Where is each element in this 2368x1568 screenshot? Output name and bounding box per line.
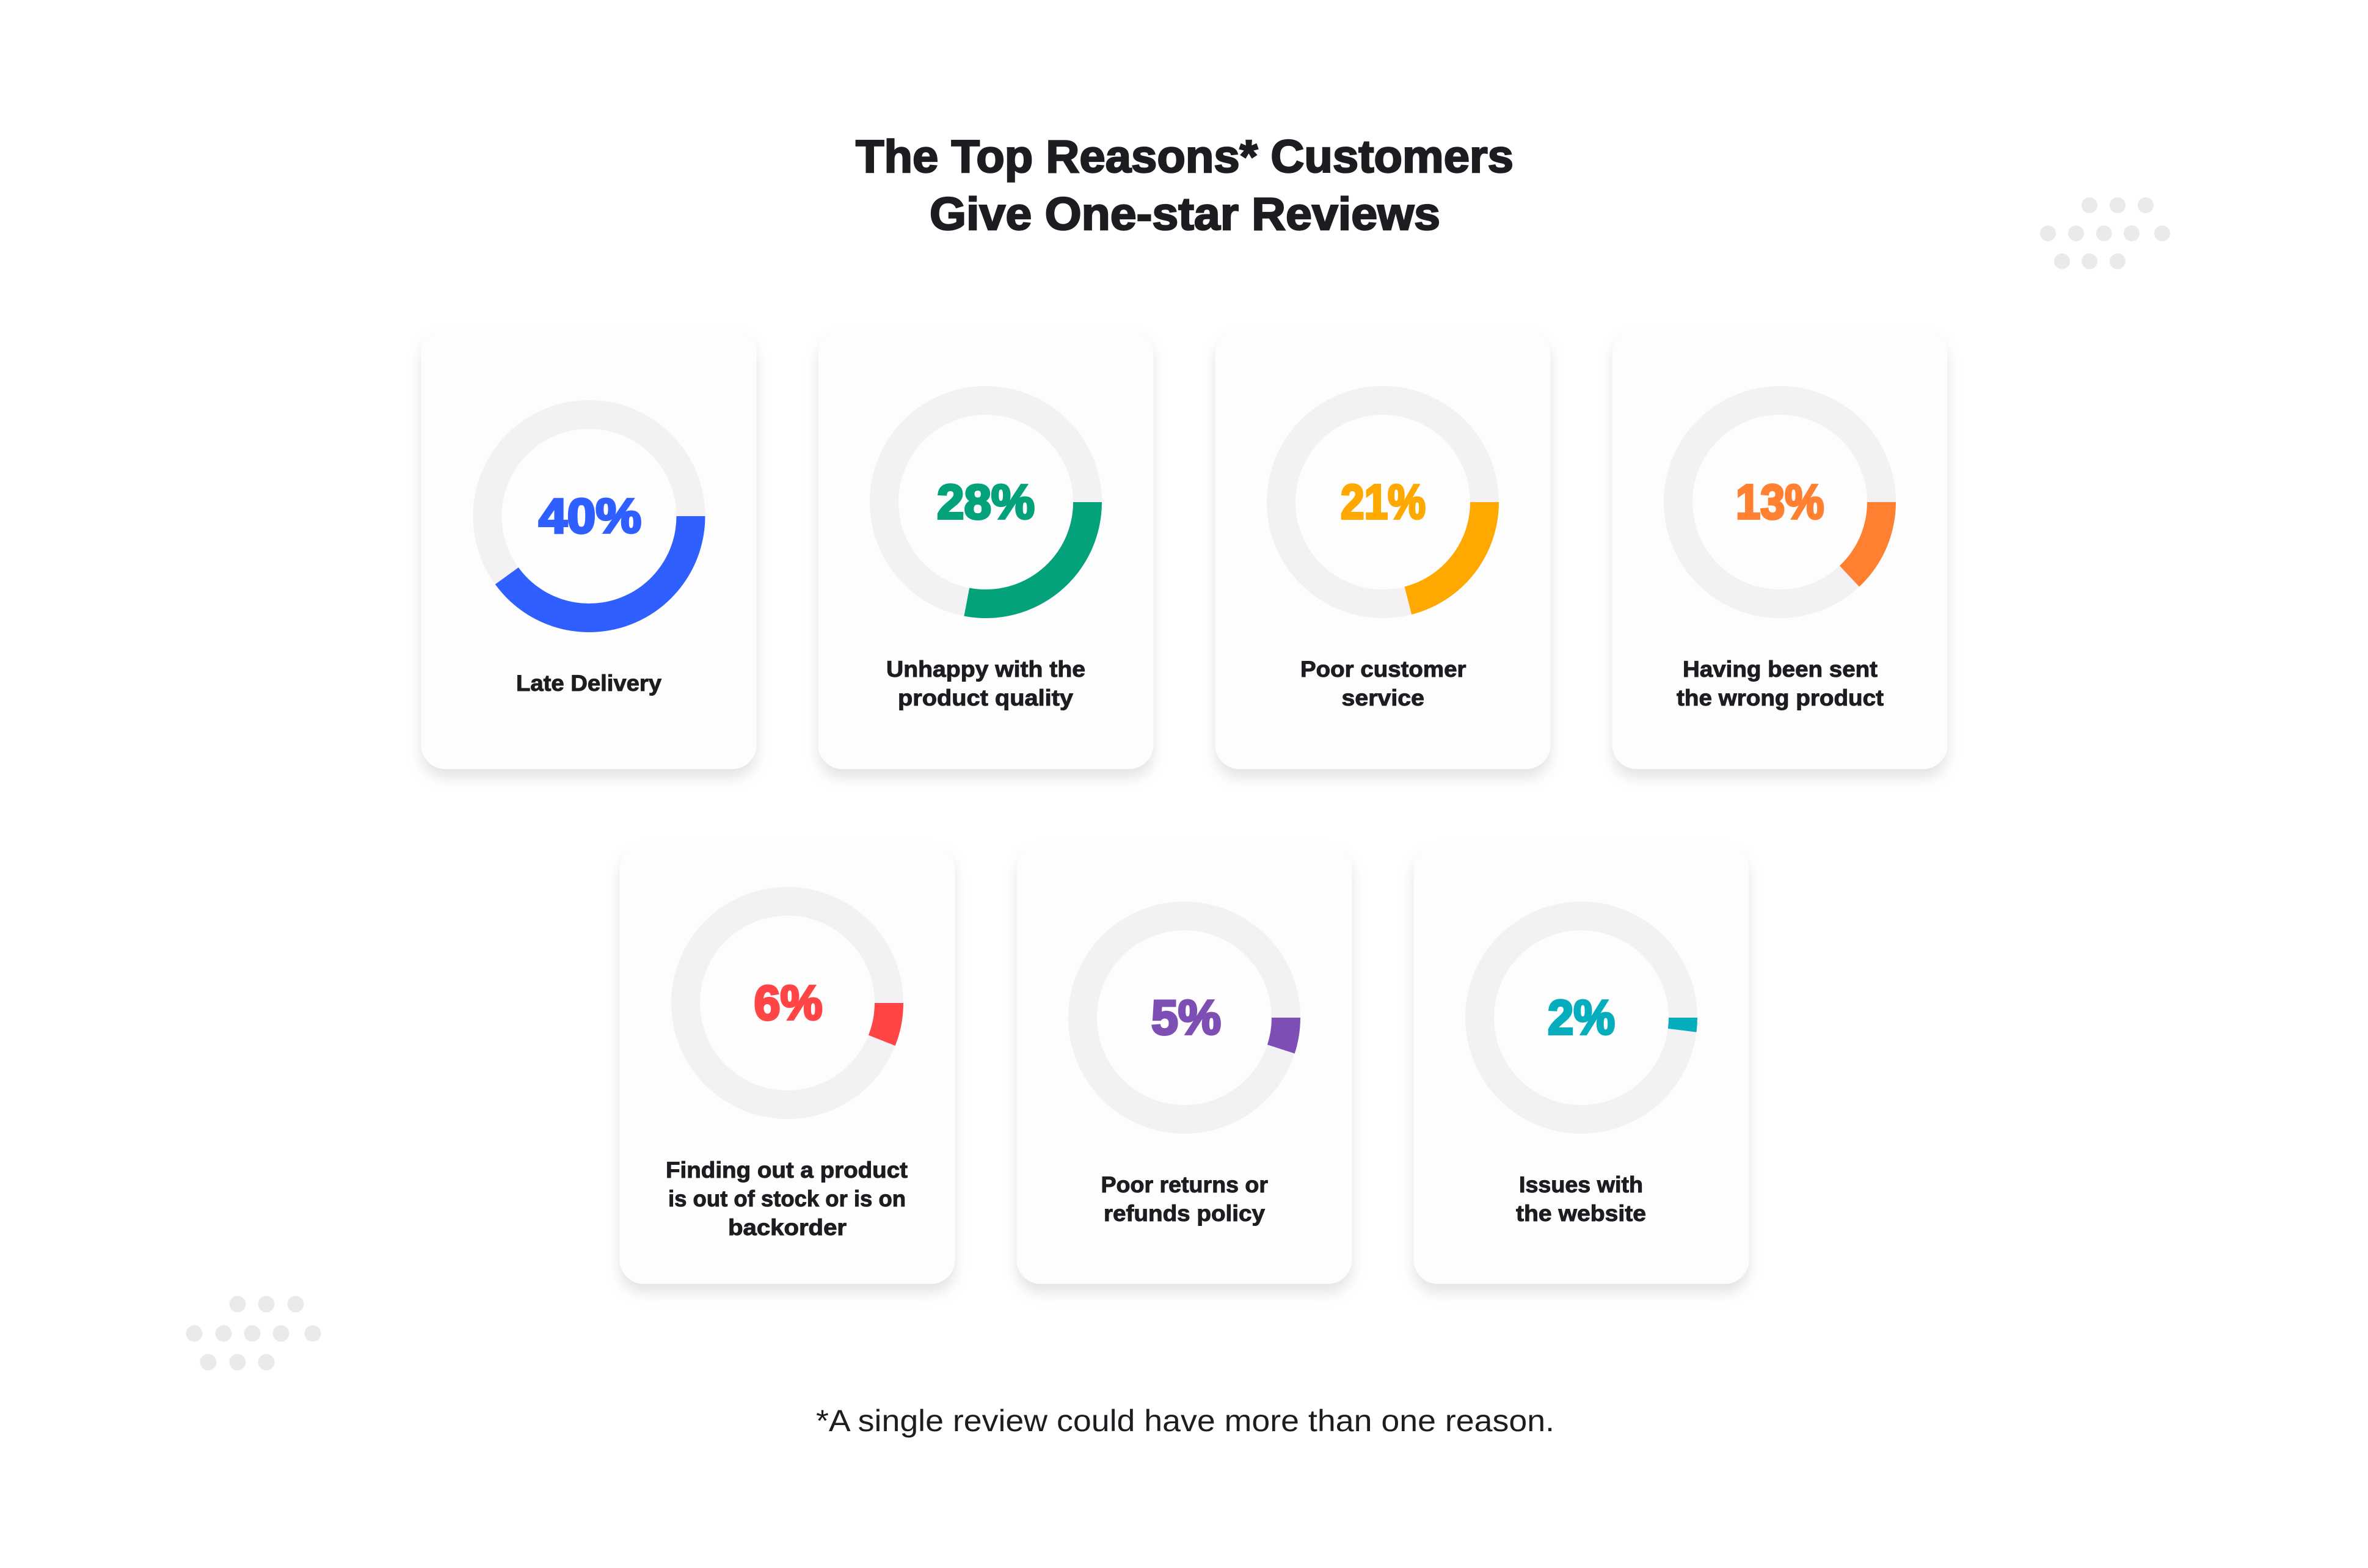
title	[856, 131, 1514, 239]
label: returns policy: Poor returns or	[1101, 1172, 1268, 1197]
label: product quality: Unhappy with the	[886, 657, 1085, 682]
donut: 28%	[884, 401, 1102, 618]
label: out of stock	[666, 1158, 908, 1240]
label: wrong product: the wrong product	[1677, 685, 1884, 710]
panel: out of stock	[619, 844, 955, 1284]
value: 5%: 5%	[1151, 990, 1221, 1045]
label: returns policy	[1101, 1172, 1268, 1226]
panel: customer service	[1215, 329, 1550, 769]
title: The Top Reasons* Customers	[856, 131, 1514, 182]
value: 40%: 40%	[539, 489, 641, 543]
footnote: *A single review could have more than one reason.	[816, 1404, 1554, 1438]
panel: website issues	[1413, 844, 1749, 1284]
value: 28%: 28%	[937, 475, 1035, 529]
donut: 21%	[1281, 401, 1499, 614]
panel: late delivery	[421, 329, 756, 769]
panel: returns policy	[1016, 844, 1352, 1284]
value: 21%: 21%	[1341, 475, 1426, 529]
label: wrong product	[1677, 657, 1884, 710]
value: 13%: 13%	[1736, 475, 1824, 529]
label: website issues: the website	[1516, 1201, 1646, 1226]
label: website issues: Issues with	[1519, 1172, 1643, 1197]
label: late delivery: Late Delivery	[516, 671, 661, 696]
value: 2%: 2%	[1548, 990, 1615, 1045]
title: Give One-star Reviews	[930, 188, 1440, 239]
label: wrong product: Having been sent	[1683, 657, 1878, 682]
label: customer service: Poor customer	[1300, 657, 1466, 682]
label: product quality	[886, 657, 1085, 710]
donut: 2%	[1479, 916, 1697, 1119]
label: out of stock: Finding out a product	[666, 1158, 908, 1183]
panel: product quality	[818, 329, 1153, 769]
label: out of stock: backorder	[728, 1215, 847, 1240]
label: customer service	[1300, 657, 1466, 710]
donut: 6%	[685, 902, 903, 1104]
decorative dots: top right	[2040, 197, 2170, 269]
donut: 5%	[1082, 916, 1300, 1119]
label: product quality: product quality	[898, 685, 1073, 710]
donut: 40%	[487, 414, 705, 632]
label: website issues	[1516, 1172, 1646, 1226]
value: 6%: 6%	[754, 975, 822, 1030]
decorative dots: bottom left	[186, 1296, 321, 1371]
donut: 13%	[1678, 401, 1896, 603]
label: out of stock: is out of stock or is on	[668, 1186, 906, 1211]
label: customer service: service	[1341, 685, 1424, 710]
panel: wrong product	[1612, 329, 1947, 769]
label: returns policy: refunds policy	[1104, 1201, 1265, 1226]
